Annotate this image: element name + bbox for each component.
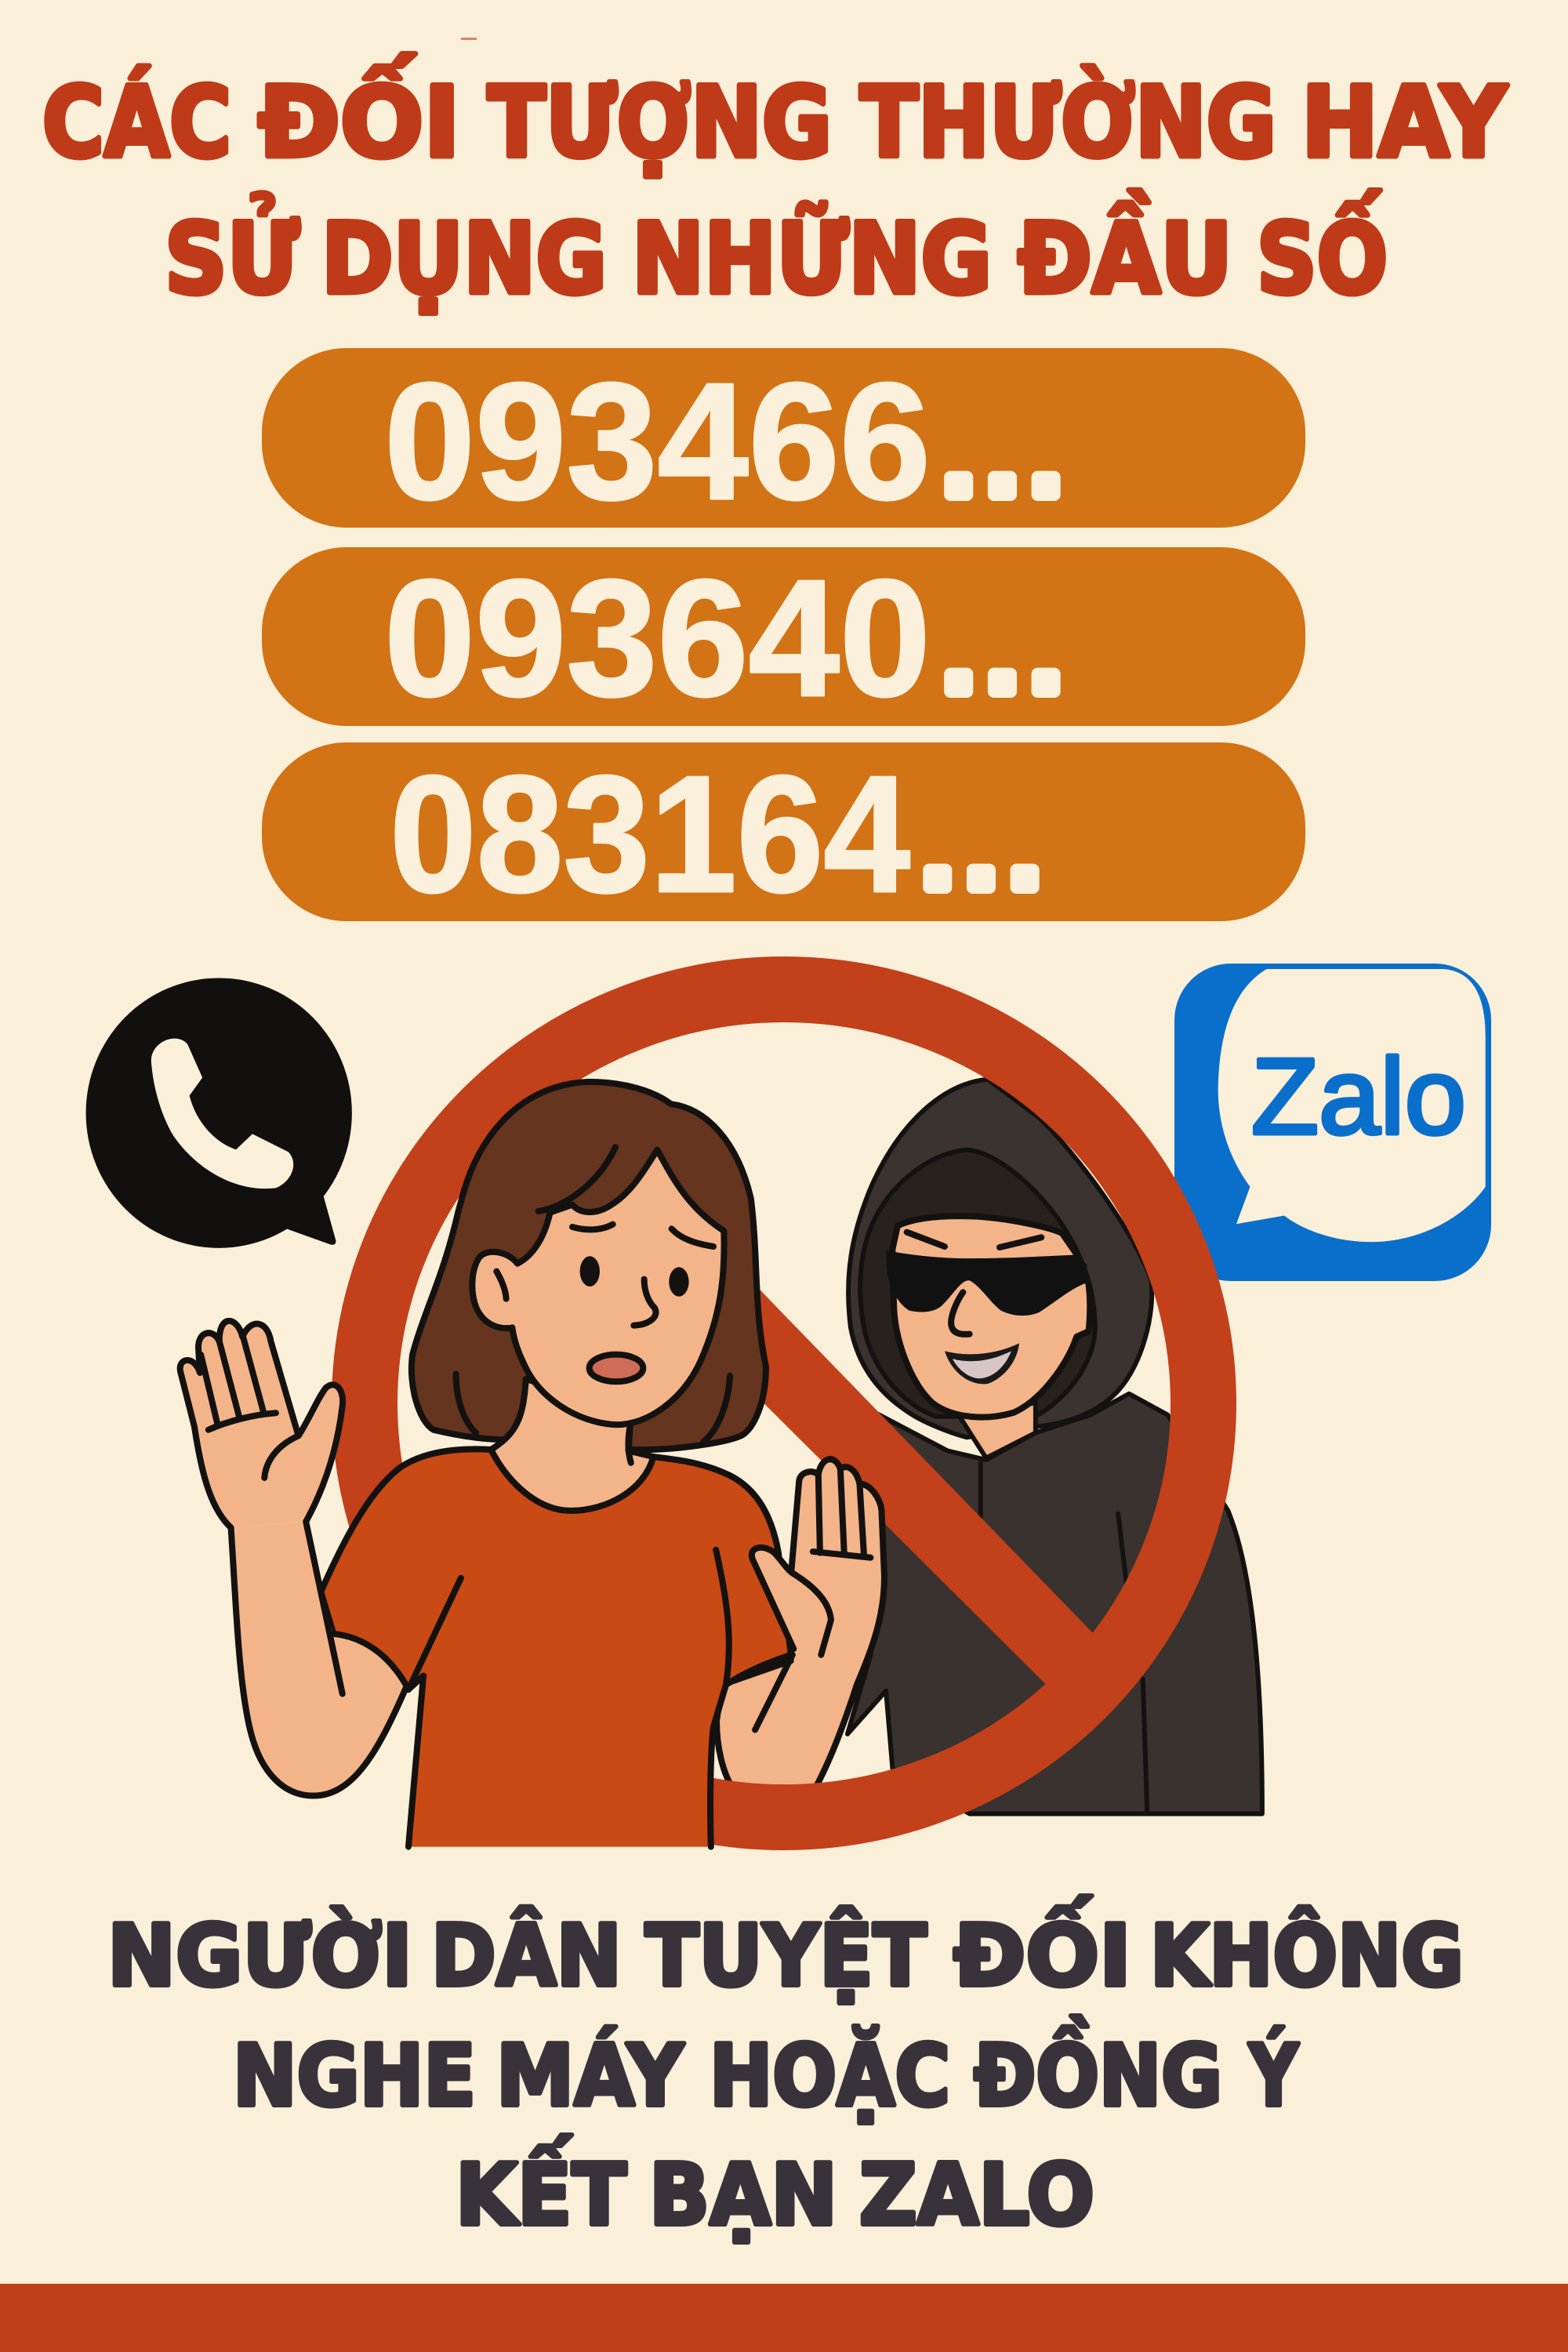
icon: phone speech bubble xyxy=(86,978,352,1248)
phone prefix pills xyxy=(262,348,1305,927)
title line 2: ĐẦU xyxy=(1018,189,1232,316)
woman left arm xyxy=(231,1522,406,1796)
title line 1: CÁC xyxy=(42,64,231,180)
woman neck xyxy=(491,1379,653,1511)
warning line 2: NGHE xyxy=(233,2027,476,2125)
title line 1: ĐỐI xyxy=(258,53,460,180)
warning line 3: BẠN xyxy=(649,2147,837,2245)
hacker body xyxy=(848,1394,1262,1814)
warning line 1: ĐỐI xyxy=(953,1895,1131,2005)
woman hair xyxy=(412,1082,766,1450)
warning line 2: Ý xyxy=(1247,2026,1299,2125)
title line 2: SỐ xyxy=(1257,189,1388,316)
warning line 3: KẾT xyxy=(456,2134,626,2245)
woman mouth xyxy=(590,1355,643,1381)
pill: 093466: 093466 xyxy=(384,348,931,534)
pill: 093640: ... xyxy=(942,585,1073,717)
title xyxy=(42,53,1508,316)
warning line 2 xyxy=(233,2016,1299,2125)
hacker neck xyxy=(959,1403,1036,1458)
illustration: hooded scammer xyxy=(848,1080,1262,1814)
smile xyxy=(945,1343,1019,1384)
title line 1: THƯỜNG xyxy=(860,65,1276,180)
title line 2: SỬ xyxy=(165,192,299,316)
hacker hood xyxy=(848,1080,1152,1437)
woman shirt xyxy=(321,1449,791,1847)
warning line 1: NGƯỜI xyxy=(107,1906,412,2005)
warning line 3: ZALO xyxy=(859,2147,1094,2245)
pill: 083164: ... xyxy=(921,781,1052,913)
pill: 083164 xyxy=(262,741,1305,927)
title line 1 xyxy=(42,53,1508,180)
warning line 2: MÁY xyxy=(496,2026,685,2125)
title line 2: NHỮNG xyxy=(632,201,992,316)
closing warning text xyxy=(107,1895,1464,2245)
woman right arm and hand xyxy=(717,1459,884,1793)
prohibition slash xyxy=(717,1243,1107,1701)
title line 1: HAY xyxy=(1301,67,1508,180)
pill: 093466 xyxy=(262,348,1305,534)
woman nose xyxy=(633,1279,656,1326)
warning line 3 xyxy=(456,2134,1094,2245)
woman face xyxy=(512,1150,724,1425)
pill: 093640: 093640 xyxy=(384,545,931,731)
warning line 1: DÂN xyxy=(431,1906,622,2005)
footer bar xyxy=(0,2284,1568,2352)
prohibition ring xyxy=(365,989,1203,1817)
title line 2: DỤNG xyxy=(321,203,607,316)
pill: 093466: ... xyxy=(942,388,1073,520)
illustration: worried woman xyxy=(180,1082,831,1847)
sunglasses xyxy=(886,1250,1087,1316)
warning line 1: KHÔNG xyxy=(1150,1906,1464,2005)
warning line 2: ĐỒNG xyxy=(974,2016,1222,2125)
warning line 1: TUYỆT xyxy=(645,1906,927,2005)
icon: Zalo logo xyxy=(1174,964,1491,1281)
pill: 093640 xyxy=(262,545,1305,731)
warning line 1 xyxy=(107,1895,1464,2005)
woman eyes and brows xyxy=(580,1256,600,1287)
woman left hand xyxy=(180,1321,343,1527)
woman right thumb over shirt xyxy=(752,1548,831,1655)
title line 2 xyxy=(165,189,1388,316)
icon: Zalo logo: Zalo xyxy=(1251,1036,1466,1157)
warning line 2: HOẶC xyxy=(710,2025,950,2125)
woman ear xyxy=(472,1252,517,1328)
title line 1: TƯỢNG xyxy=(488,67,832,180)
pill: 083164: 083164 xyxy=(390,741,910,927)
hacker face xyxy=(892,1216,1090,1417)
